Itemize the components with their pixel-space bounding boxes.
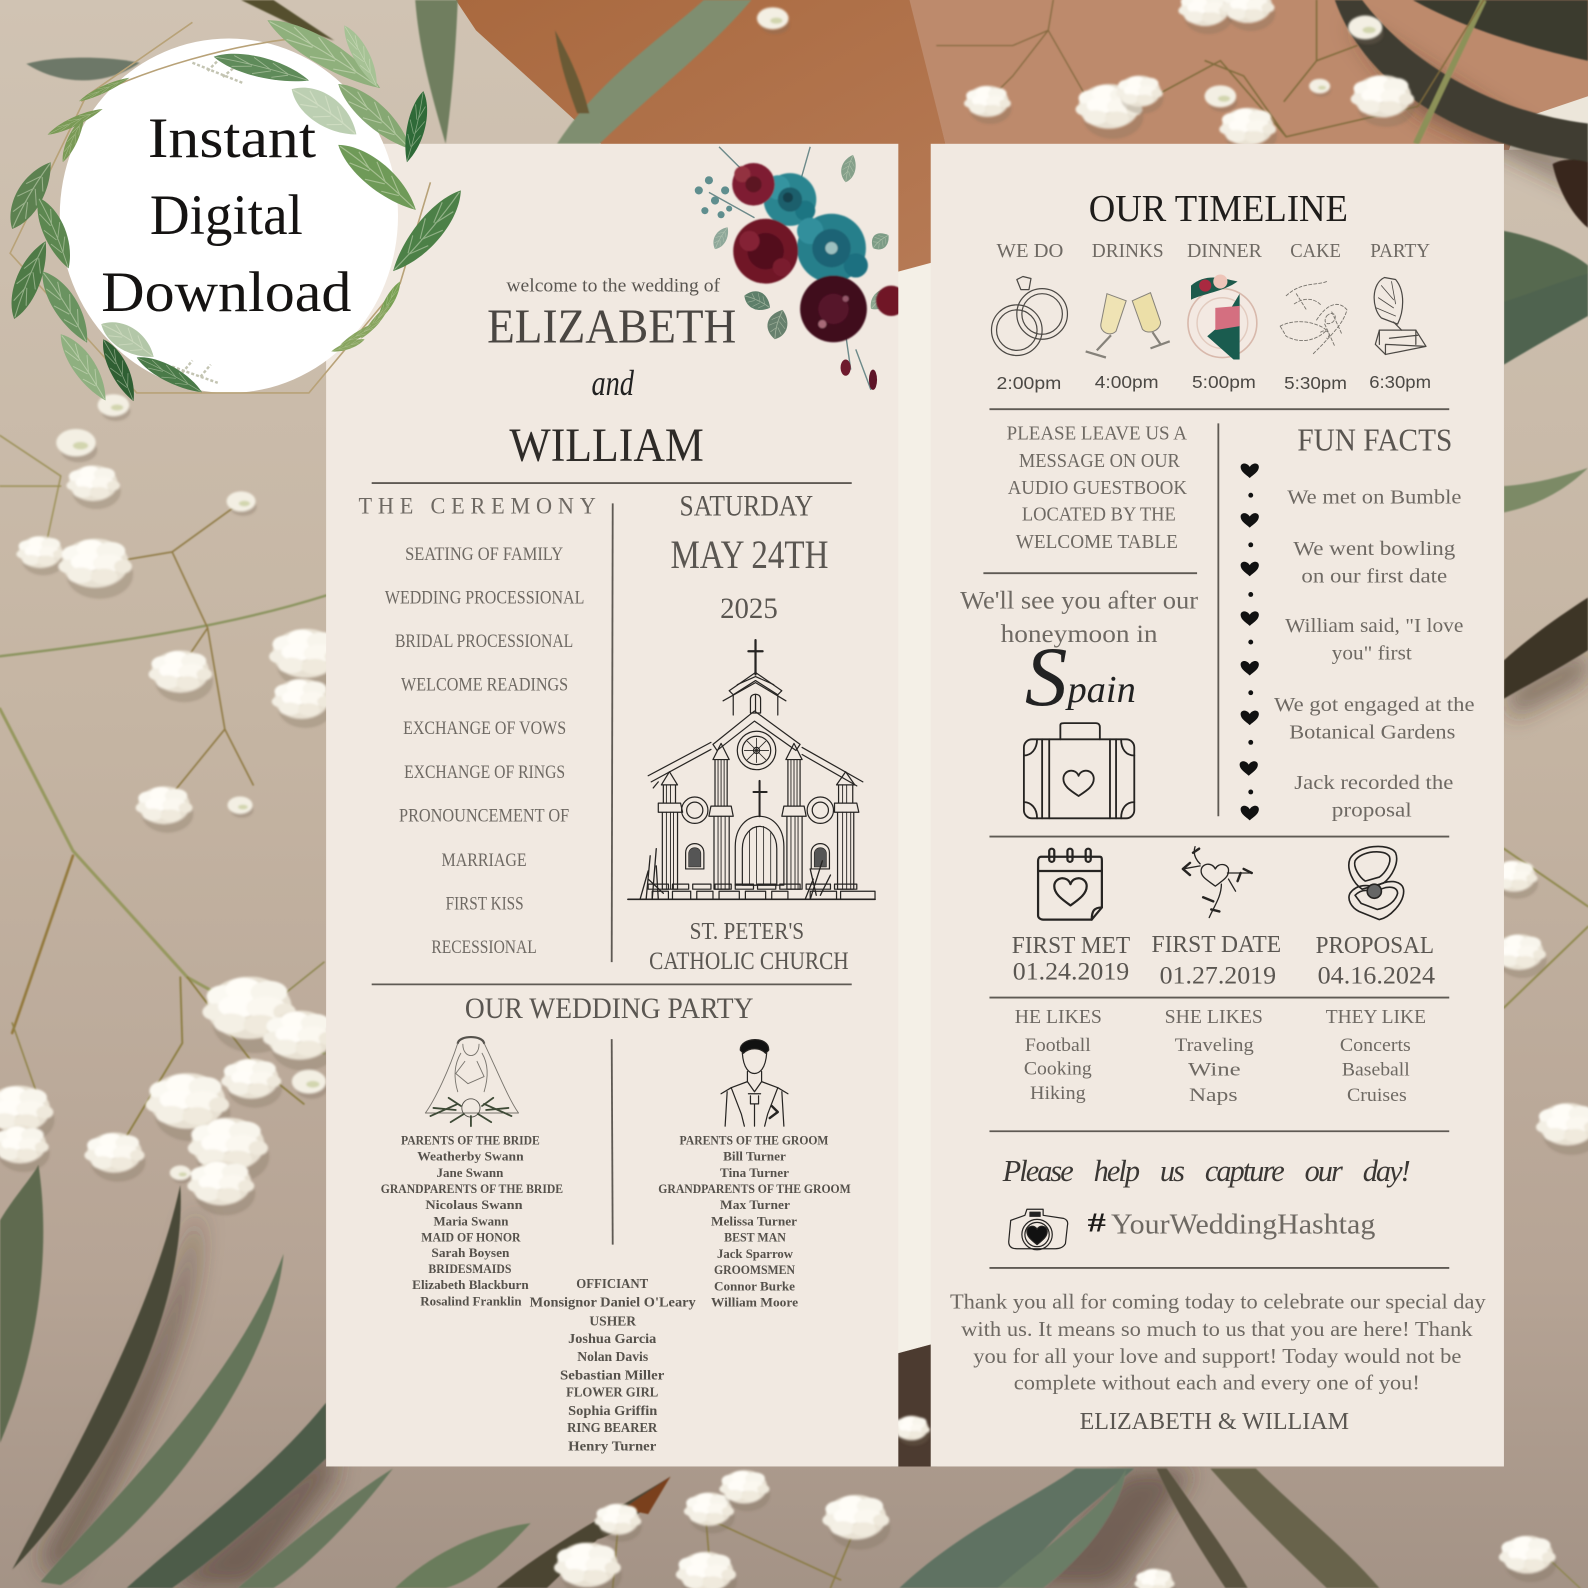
floral bouquet (695, 147, 906, 390)
list: groom's party: BEST MAN (724, 1231, 786, 1245)
icon: camera (1009, 1209, 1068, 1250)
text: signature names: ELIZABETH & WILLIAM (1080, 1408, 1349, 1435)
list: groom's party: Connor Burke (714, 1279, 796, 1293)
list: bride's party: Rosalind Franklin (420, 1294, 522, 1308)
section: ceremony order: RECESSIONAL (431, 937, 537, 958)
timeline headers (997, 240, 1430, 262)
icon: dinner plate (1188, 274, 1257, 360)
badge: heading text: Digital (150, 184, 303, 247)
list: groom's party: PARENTS OF THE GROOM (680, 1133, 829, 1147)
background: terracotta paper (456, 0, 1588, 279)
section: key dates: PROPOSAL (1316, 932, 1434, 959)
list: bride's party (381, 1133, 563, 1308)
list: groom's party: Jack Sparrow (717, 1247, 793, 1261)
list: bride's party: Elizabeth Blackburn (412, 1278, 529, 1292)
icon: cake sketch (1280, 282, 1347, 354)
list: fun facts: Botanical Gardens (1289, 721, 1455, 743)
section: likes: Cruises (1347, 1085, 1407, 1106)
badge: heading text: Download (101, 261, 351, 324)
list: bride's party: Sarah Boysen (431, 1246, 510, 1260)
badge: wreath leaves (0, 8, 472, 406)
badge: gold hexagon frame (10, 22, 430, 393)
list: bride's party: Jane Swann (436, 1166, 504, 1180)
list: officiant and attendants: Monsignor Daniel O'Leary (530, 1294, 696, 1309)
list: bride's party: GRANDPARENTS OF THE BRIDE (381, 1182, 563, 1196)
list: bride's party: BRIDESMAIDS (428, 1262, 512, 1276)
icon: suitcase (1024, 723, 1134, 818)
badge: instant digital download wreath (0, 8, 472, 406)
text block: thank you message: complete without each and every one of you! (1014, 1371, 1420, 1395)
list: groom's party: Bill Turner (723, 1150, 787, 1164)
badge: heading text (101, 107, 351, 324)
section: ceremony order: MARRIAGE (442, 850, 527, 871)
list: groom's party (658, 1133, 851, 1309)
timeline headers: DRINKS (1092, 240, 1164, 262)
church: steps and plants (628, 898, 875, 900)
section: likes: HE LIKES (1015, 1006, 1102, 1028)
list: groom's party: GROOMSMEN (714, 1263, 795, 1277)
text block: thank you message: you for all your love and support! Today would not be (973, 1344, 1461, 1368)
list: officiant and attendants: Henry Turner (568, 1438, 656, 1453)
heading: and script: and (591, 363, 635, 403)
section: date: MAY 24TH (670, 532, 828, 577)
bottom right leaves (899, 1468, 1134, 1588)
icon: calendar heart (1038, 849, 1102, 920)
panel: timeline and details card (931, 144, 1504, 1466)
text block: thank you message (950, 1289, 1486, 1395)
top centre leaf (415, 0, 458, 144)
script: Spain: S (1025, 630, 1067, 724)
list: fun facts (1274, 486, 1475, 821)
list: fun facts: We got engaged at the (1274, 694, 1475, 716)
section: likes: SHE LIKES (1165, 1006, 1263, 1028)
section: date: 2025 (720, 593, 778, 625)
section: likes: Football (1025, 1035, 1091, 1056)
icon: wedding rings (991, 276, 1067, 355)
section: likes: Baseball (1342, 1060, 1410, 1081)
section: likes: Concerts (1340, 1035, 1411, 1056)
badge: heading text: Instant (148, 107, 316, 170)
section: date (670, 490, 828, 625)
list: officiant and attendants: USHER (589, 1314, 637, 1329)
icon: groom (721, 1040, 788, 1126)
section: ceremony order: SEATING OF FAMILY (405, 544, 563, 565)
text block: audio guestbook: MESSAGE ON OUR (1019, 450, 1180, 472)
list: bride's party: Maria Swann (433, 1214, 509, 1228)
list: officiant and attendants: FLOWER GIRL (566, 1385, 658, 1400)
script: Spain: pain (1064, 669, 1136, 711)
list: officiant and attendants: Sebastian Miller (560, 1367, 665, 1382)
timeline headers: DINNER (1187, 240, 1262, 262)
list: groom's party: Tina Turner (720, 1166, 790, 1180)
text block: honeymoon: We'll see you after our (960, 587, 1199, 615)
section: ceremony order: EXCHANGE OF VOWS (403, 718, 566, 739)
list: fun facts: Jack recorded the (1294, 772, 1453, 794)
text block: audio guestbook: PLEASE LEAVE US A (1007, 423, 1187, 445)
icon: gramophone (1374, 277, 1426, 354)
timeline headers: PARTY (1370, 240, 1430, 262)
list: officiant and attendants: RING BEARER (567, 1420, 658, 1435)
list: officiant and attendants: Joshua Garcia (568, 1331, 657, 1346)
heading: fun facts: FUN FACTS (1297, 423, 1452, 458)
icon: heart and dot trail (1240, 463, 1259, 820)
list: officiant and attendants: OFFICIANT (576, 1276, 648, 1291)
list: groom's party: William Moore (711, 1295, 799, 1309)
timeline times: 4:00pm (1095, 372, 1159, 392)
text: hashtag: # (1088, 1208, 1106, 1238)
lower-left leaves (0, 1165, 43, 1443)
timeline times: 5:00pm (1192, 372, 1256, 392)
text block: thank you message: Thank you all for coming today to celebrate our special day (950, 1289, 1486, 1313)
heading: welcome text: welcome to the wedding of (506, 276, 721, 297)
list: bride's party: Weatherby Swann (417, 1150, 524, 1164)
text block: thank you message: with us. It means so much to us that you are here! Thank (961, 1317, 1473, 1341)
text: church name: ST. PETER'S (690, 918, 804, 945)
list: fun facts: We met on Bumble (1287, 486, 1461, 508)
section: ceremony order: WEDDING PROCESSIONAL (385, 588, 584, 609)
badge: white disc (60, 38, 398, 393)
section: likes: Hiking (1030, 1083, 1086, 1104)
list: fun facts: on our first date (1301, 565, 1447, 587)
timeline headers: WE DO (997, 240, 1063, 262)
icon: heart sprig (1183, 847, 1252, 918)
heading: groom name: WILLIAM (509, 420, 704, 472)
list: groom's party: Melissa Turner (711, 1214, 798, 1228)
section: key dates: 04.16.2024 (1318, 961, 1435, 989)
list: fun facts: We went bowling (1293, 538, 1455, 560)
timeline headers: CAKE (1290, 240, 1341, 262)
list: bride's party: PARENTS OF THE BRIDE (401, 1133, 540, 1147)
icon: bride (425, 1037, 519, 1126)
panel: ceremony program card (326, 144, 906, 1466)
text: hashtag: YourWeddingHashtag (1111, 1210, 1375, 1241)
top right dark leaves (1335, 0, 1588, 162)
badge: pale sprigs (172, 61, 243, 383)
right side leaves (1504, 231, 1588, 304)
section: key dates: 01.24.2019 (1013, 957, 1129, 985)
section: ceremony order (359, 493, 602, 958)
list: bride's party: Nicolaus Swann (425, 1198, 523, 1212)
list: officiant and attendants: Sophia Griffin (568, 1403, 658, 1418)
section: likes: THEY LIKE (1326, 1006, 1426, 1028)
section: ceremony order: EXCHANGE OF RINGS (404, 762, 565, 783)
section: ceremony order: BRIDAL PROCESSIONAL (395, 631, 573, 652)
section: likes: Naps (1189, 1085, 1238, 1106)
script: capture our day: Please help us capture our day! (1002, 1154, 1411, 1188)
text block: honeymoon (960, 587, 1199, 648)
icon: champagne glasses (1086, 293, 1170, 358)
text: church name: CATHOLIC CHURCH (649, 947, 849, 975)
heading: our wedding party: OUR WEDDING PARTY (465, 993, 753, 1025)
heading: bride name: ELIZABETH (487, 299, 736, 353)
section: ceremony order: WELCOME READINGS (401, 675, 568, 696)
timeline times: 6:30pm (1369, 372, 1431, 392)
section: key dates: 01.27.2019 (1160, 961, 1276, 989)
section: ceremony order: THE CEREMONY (359, 493, 602, 519)
section: key dates (1012, 931, 1435, 989)
section: date: SATURDAY (680, 490, 813, 522)
text: church name (649, 918, 849, 975)
icon: ring box (1349, 846, 1404, 920)
list: officiant and attendants: Nolan Davis (577, 1349, 648, 1364)
list: fun facts: proposal (1332, 799, 1412, 821)
list: officiant and attendants (530, 1276, 696, 1453)
text block: audio guestbook: LOCATED BY THE (1022, 504, 1176, 526)
section: ceremony order: FIRST KISS (446, 893, 524, 914)
church: towers (709, 743, 733, 889)
list: groom's party: Max Turner (720, 1198, 791, 1212)
section: likes: Traveling (1175, 1035, 1254, 1056)
timeline times: 5:30pm (1284, 373, 1347, 393)
section: likes (1015, 1006, 1426, 1106)
timeline times: 2:00pm (997, 373, 1061, 393)
text block: audio guestbook (1007, 423, 1187, 553)
list: fun facts: William said, "I love (1285, 615, 1463, 637)
list: groom's party: GRANDPARENTS OF THE GROOM (658, 1182, 851, 1196)
section: ceremony order: PRONOUNCEMENT OF (399, 805, 569, 826)
text block: audio guestbook: WELCOME TABLE (1016, 531, 1178, 553)
text block: honeymoon: honeymoon in (1001, 620, 1158, 648)
timeline times (997, 372, 1431, 393)
section: likes: Cooking (1024, 1059, 1092, 1080)
list: bride's party: MAID OF HONOR (421, 1231, 521, 1245)
background: white paper between cards (891, 261, 937, 1466)
heading: our timeline: OUR TIMELINE (1089, 188, 1348, 230)
text block: audio guestbook: AUDIO GUESTBOOK (1008, 477, 1187, 499)
icon: church line drawing (628, 640, 875, 899)
section: key dates: FIRST MET (1012, 932, 1130, 959)
section: likes: Wine (1188, 1060, 1241, 1081)
list: fun facts: you" first (1332, 642, 1412, 664)
section: key dates: FIRST DATE (1152, 931, 1281, 958)
church: door and windows (753, 781, 767, 816)
